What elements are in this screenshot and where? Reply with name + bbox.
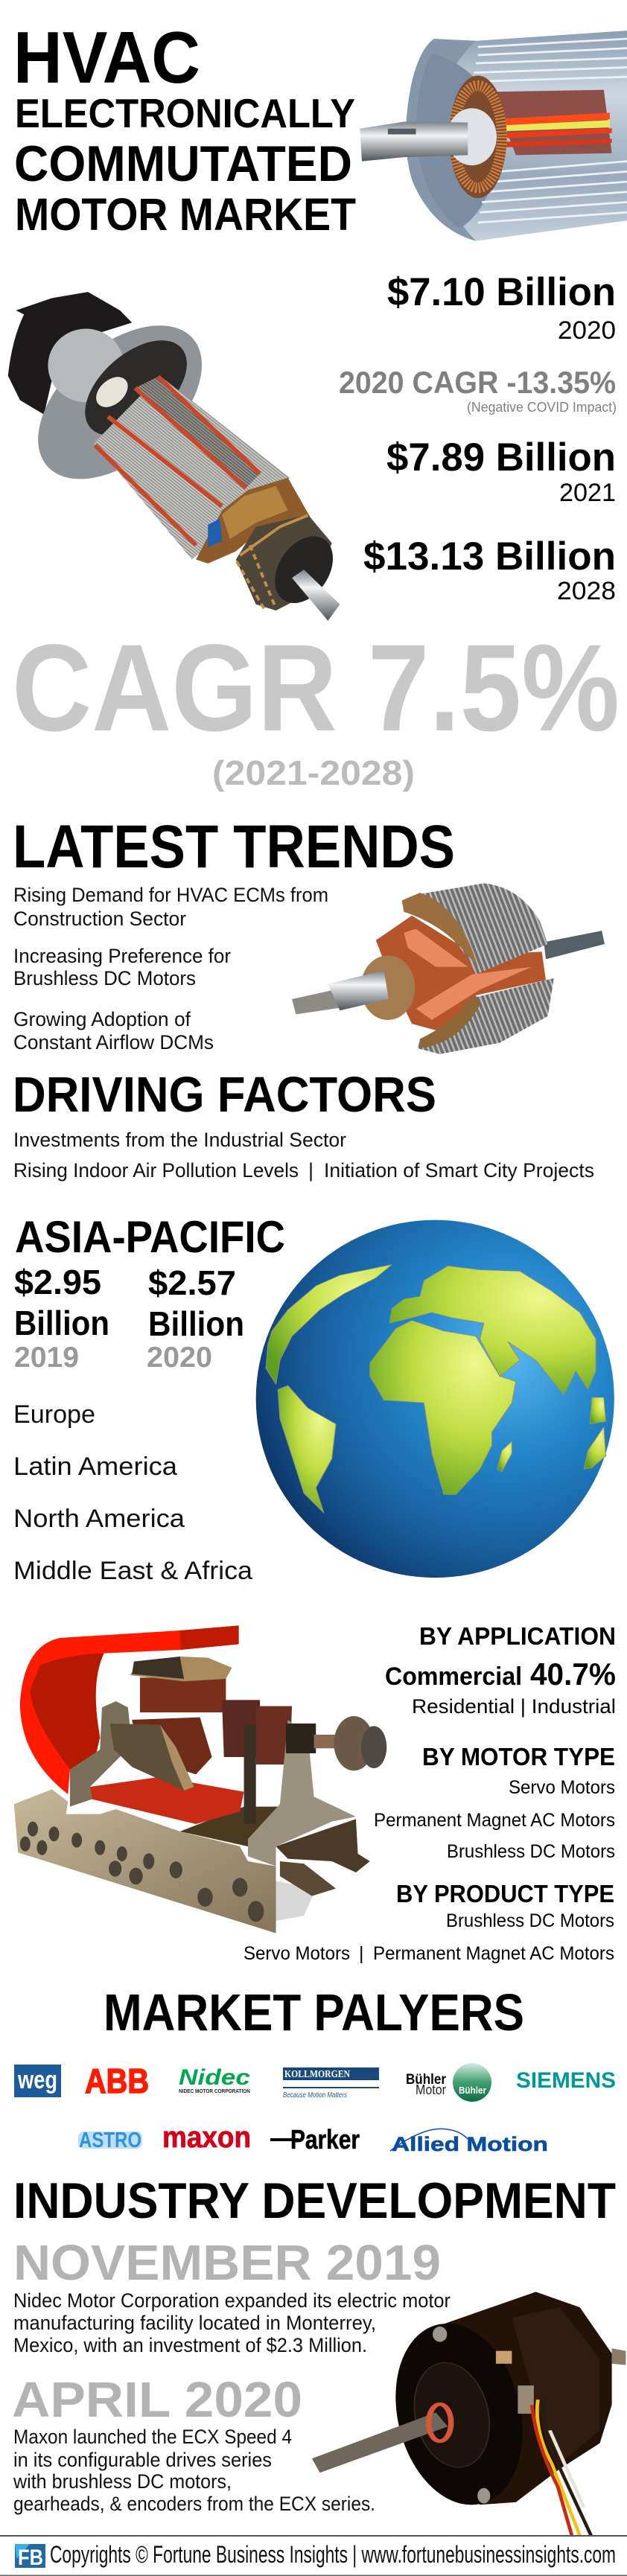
logo: WEG: weg: [17, 2066, 57, 2094]
regional figures: 2019: [14, 1342, 79, 1374]
image: armature with fan: [8, 292, 345, 621]
logo: ABB: ABB: [85, 2062, 149, 2100]
segmentation: by product type: Servo Motors: [244, 1943, 350, 1964]
footer logo: FB: [18, 2545, 43, 2570]
market size figures: (Negative COVID Impact): [467, 400, 617, 415]
logo: Kollmorgen: Because Motion Matters: [283, 2091, 347, 2100]
heading: market players: MARKET PALYERS: [104, 1983, 524, 2041]
logo: Allied Motion: [390, 2129, 548, 2155]
other regions list: North America: [13, 1505, 185, 1533]
development text: Nidec: manufacturing facility located in Monterrey,: [13, 2312, 376, 2334]
development text: Maxon: [13, 2426, 375, 2515]
image: globe: [256, 1220, 614, 1578]
segmentation: by motor type: Brushless DC Motors: [447, 1841, 615, 1862]
market size figures: $7.89 Billion: [386, 436, 616, 479]
other regions list: [13, 1400, 252, 1585]
market size figures: 2020: [558, 316, 616, 345]
title: COMMUTATED: [14, 136, 352, 192]
development text: Maxon: Maxon launched the ECX Speed 4: [13, 2426, 292, 2448]
footer bottom rule: [0, 2575, 627, 2576]
heading: driving factors: DRIVING FACTORS: [13, 1067, 436, 1123]
driving factors list: Initiation of Smart City Projects: [324, 1159, 594, 1182]
segmentation: by product type: [244, 1880, 614, 1964]
image: cutaway motor: [360, 31, 627, 241]
trends list: Construction Sector: [13, 908, 186, 930]
market size figures: [339, 270, 617, 605]
segmentation: by motor type: [374, 1743, 615, 1862]
regional figures: 2020: [147, 1342, 212, 1374]
segmentation: by motor type: BY MOTOR TYPE: [422, 1743, 615, 1770]
title: ELECTRONICALLY: [15, 90, 355, 136]
date: April 2020: APRIL 2020: [12, 2372, 302, 2428]
logo: Allied Motion: Allied Motion: [392, 2133, 548, 2155]
CAGR period: (2021-2028): [212, 753, 415, 792]
trends list: [13, 884, 328, 1053]
development text: Maxon: with brushless DC motors,: [13, 2470, 232, 2493]
logo: Maxon: maxon: [162, 2121, 251, 2154]
logo: Parker: Parker: [290, 2124, 360, 2155]
development text: Maxon: in its configurable drives series: [13, 2449, 272, 2471]
segmentation: by product type: |: [359, 1943, 363, 1964]
segmentation: by product type: Permanent Magnet AC Motors: [373, 1943, 614, 1964]
logo: Parker: [270, 2124, 360, 2155]
segmentation: by product type: Brushless DC Motors: [446, 1910, 614, 1931]
regional figures: [14, 1263, 244, 1374]
logo: Kollmorgen: KOLLMORGEN: [284, 2069, 350, 2080]
segmentation: by motor type: Permanent Magnet AC Motors: [374, 1810, 615, 1831]
segmentation: by application: [385, 1622, 616, 1718]
logo: Kollmorgen: [283, 2068, 379, 2100]
segmentation: by application: 40.7%: [530, 1657, 616, 1692]
logo: Nidec: NIDEC MOTOR CORPORATION: [179, 2088, 250, 2094]
logo: Nidec: Nidec: [179, 2065, 250, 2090]
market size figures: 2021: [559, 479, 616, 507]
trends list: Increasing Preference for: [13, 945, 231, 967]
market size figures: $13.13 Billion: [363, 535, 616, 578]
market size figures: $7.10 Billion: [387, 270, 616, 314]
trends list: Rising Demand for HVAC ECMs from: [13, 884, 328, 906]
trends list: Constant Airflow DCMs: [13, 1031, 214, 1053]
logo: Astro: ASTRO: [79, 2129, 141, 2152]
regional figures: $2.95: [14, 1263, 101, 1301]
trends list: Brushless DC Motors: [13, 967, 196, 989]
market size figures: 2028: [557, 577, 616, 605]
title: [13, 16, 356, 240]
trends list: Growing Adoption of: [13, 1008, 191, 1030]
segmentation: by application: Residential | Industrial: [412, 1695, 616, 1718]
title: HVAC: [13, 16, 200, 98]
heading: asia-pacific: ASIA-PACIFIC: [15, 1212, 285, 1262]
logo: Bühler Motor: Motor: [416, 2082, 446, 2097]
logo: Siemens: SIEMENS: [516, 2068, 616, 2093]
segmentation: by motor type: Servo Motors: [509, 1777, 615, 1798]
date: November 2019: NOVEMBER 2019: [13, 2235, 441, 2291]
logo: Bühler Motor: Bühler: [406, 2072, 447, 2088]
segmentation: by application: BY APPLICATION: [419, 1622, 616, 1650]
image: black brushless motor: [312, 2292, 626, 2536]
driving factors list: Rising Indoor Air Pollution Levels: [13, 1159, 299, 1182]
image: vintage motor with red hood: [14, 1625, 386, 1933]
other regions list: Middle East & Africa: [13, 1557, 252, 1585]
development text: Nidec: [13, 2289, 451, 2356]
other regions list: Europe: [13, 1400, 95, 1429]
image: copper rotor: [292, 883, 605, 1054]
regional figures: Billion: [148, 1304, 244, 1343]
market size figures: 2020 CAGR -13.35%: [339, 365, 616, 400]
development text: Nidec: Mexico, with an investment of $2.3 Million.: [13, 2334, 367, 2356]
heading: latest trends: LATEST TRENDS: [13, 813, 455, 881]
development text: Maxon: gearheads, & encoders from the ECX series.: [13, 2493, 375, 2515]
regional figures: $2.57: [148, 1263, 236, 1302]
regional figures: Billion: [14, 1304, 109, 1342]
development text: Nidec: Nidec Motor Corporation expanded its electric motor: [13, 2289, 451, 2312]
title: MOTOR MARKET: [15, 189, 356, 240]
driving factors list: Investments from the Industrial Sector: [13, 1129, 346, 1151]
footer rule: [0, 2535, 627, 2537]
logo: Bühler Motor: Bühler: [459, 2085, 486, 2096]
logo: Bühler Motor: [406, 2063, 491, 2102]
driving factors list: |: [308, 1159, 314, 1182]
segmentation: by application: Commercial: [385, 1662, 522, 1691]
other regions list: Latin America: [13, 1453, 177, 1481]
driving factors list: [13, 1129, 594, 1182]
segmentation: by product type: BY PRODUCT TYPE: [396, 1880, 614, 1907]
